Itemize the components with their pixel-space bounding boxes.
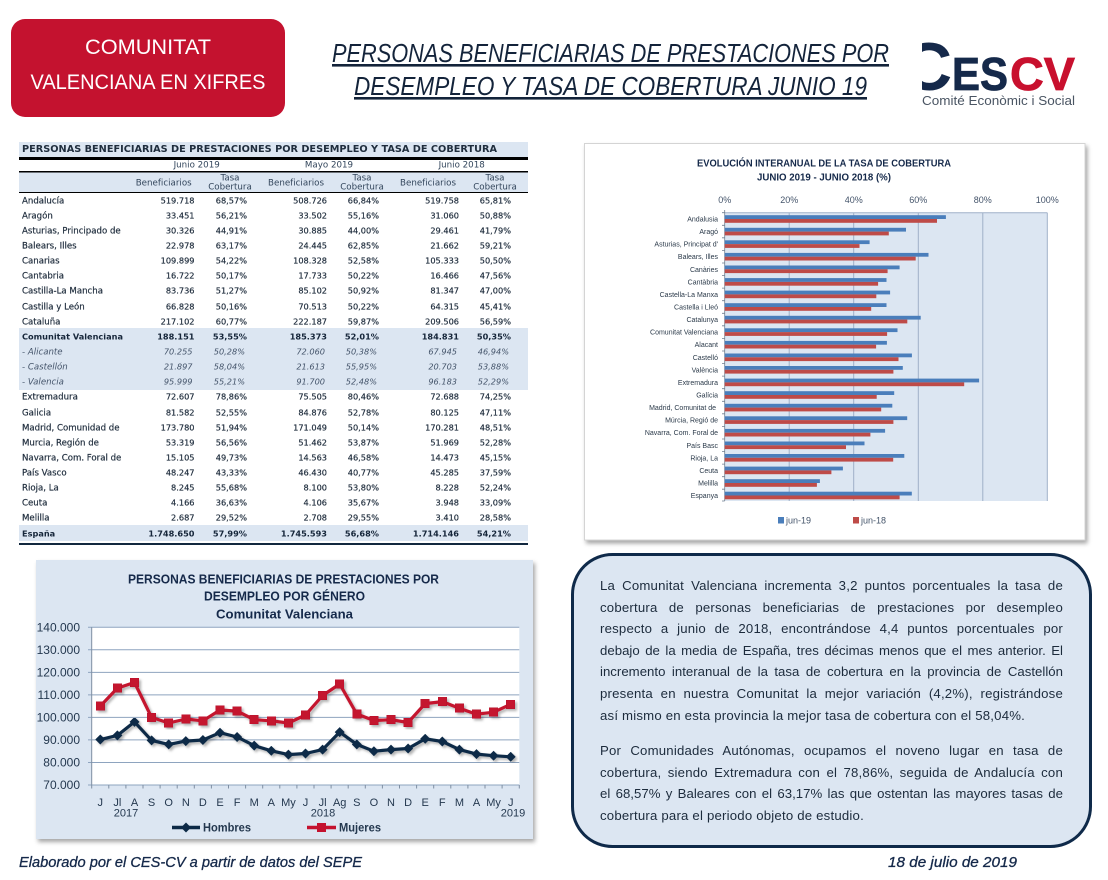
line chart legend: Mujeres: [339, 820, 381, 834]
table rows: 45,41%: [480, 302, 511, 312]
bar chart: evolución interanual de la tasa de cobertura: [584, 144, 1085, 540]
month labels: Jl: [113, 797, 121, 809]
table rows: 45,15%: [480, 453, 511, 463]
bar chart title: JUNIO 2019 - JUNIO 2018 (%): [757, 172, 891, 184]
month labels: [98, 797, 525, 820]
table header: Cobertura: [473, 182, 517, 192]
month labels: J: [508, 797, 513, 809]
table rows: 83.736: [166, 286, 194, 296]
table rows: 14.563: [298, 453, 327, 463]
logo: CES-CV: ES: [952, 48, 1008, 100]
table rows: Cataluña: [22, 318, 60, 328]
table rows: [22, 196, 511, 539]
month labels: 2019: [501, 808, 525, 820]
table title: PERSONAS BENEFICIARIAS DE PRESTACIONES POR DESEMPLEO Y TASA DE COBERTURA: [22, 144, 498, 155]
table rows: 52,55%: [216, 408, 247, 418]
y axis labels: 90.000: [43, 733, 80, 747]
table rows: 62,85%: [348, 241, 379, 251]
bar chart legend: jun-18: [860, 516, 886, 526]
table rows: Aragón: [22, 211, 53, 222]
table rows: 33.451: [166, 211, 194, 221]
month labels: D: [199, 797, 207, 809]
table rows: 222.187: [293, 316, 327, 326]
table rows: 21.897: [164, 362, 193, 372]
footer date: 18 de julio de 2019: [888, 854, 1018, 871]
line chart title: PERSONAS BENEFICIARIAS DE PRESTACIONES POR: [128, 572, 439, 586]
table rows: 209.506: [425, 316, 459, 326]
month labels: My: [281, 797, 296, 809]
table rows: 53,87%: [348, 438, 379, 448]
table rows: 53,80%: [348, 483, 379, 493]
table rows: 56,68%: [345, 529, 379, 539]
table rows: 46,94%: [478, 347, 509, 357]
table rows: 50,28%: [214, 347, 245, 357]
y axis labels: 140.000: [37, 620, 80, 634]
logo: CES-CV: CV: [1010, 48, 1075, 100]
table rows: Asturias, Principado de: [22, 227, 121, 237]
month labels: O: [164, 797, 173, 809]
bar chart axis: 60%: [909, 195, 927, 205]
table rows: Andalucía: [22, 197, 64, 207]
table rows: 54,21%: [477, 529, 511, 539]
table rows: Ceuta: [22, 499, 47, 509]
table rows: Canarias: [22, 257, 60, 267]
y axis labels: [37, 620, 80, 792]
table rows: 47,00%: [480, 286, 511, 296]
table rows: Castilla-La Mancha: [22, 287, 103, 297]
table rows: Balears, Illes: [22, 242, 77, 252]
month labels: M: [250, 797, 259, 809]
bar chart category labels: [645, 216, 718, 500]
text block: commentary: [600, 578, 1063, 823]
table rows: 185.373: [290, 332, 327, 342]
table rows: 59,21%: [480, 241, 511, 251]
text block: commentary: respecto a junio de 2018, encontrándose 4,4 puntos porcentuales por: [600, 621, 1063, 636]
table rows: 108.328: [293, 256, 327, 266]
y axis labels: 130.000: [37, 643, 80, 657]
table rows: 4.166: [171, 498, 194, 508]
table rows: 54,22%: [216, 256, 247, 266]
table rows: 1.714.146: [413, 529, 459, 539]
table rows: 8.100: [304, 483, 327, 493]
table rows: - Valencia: [22, 378, 64, 388]
table rows: 46,58%: [348, 453, 379, 463]
table rows: 96.183: [428, 377, 457, 387]
table rows: 49,73%: [216, 453, 247, 463]
table rows: 44,91%: [216, 226, 247, 236]
table rows: - Castellón: [22, 362, 68, 373]
table rows: Rioja, La: [22, 484, 59, 494]
text block: commentary: cobertura, siendo Extremadura con el 78,86%, seguida de Andalucía con: [600, 765, 1063, 780]
text block: commentary: incremento interanual de la tasa de cobertura en la provincia de Castellón: [600, 664, 1063, 679]
table rows: 51,27%: [216, 286, 247, 296]
bars jun-19: [725, 215, 979, 495]
table rows: España: [22, 529, 55, 539]
table rows: Castilla y León: [22, 302, 85, 312]
table rows: 52,28%: [480, 438, 511, 448]
table rows: 37,59%: [480, 468, 511, 478]
table rows: 47,11%: [480, 408, 511, 418]
table header: [136, 160, 517, 192]
table rows: 64.315: [430, 302, 459, 312]
table rows: 50,35%: [477, 332, 511, 342]
table rows: 81.347: [430, 286, 459, 296]
table rows: 51,94%: [216, 423, 247, 433]
bar chart legend: jun-19: [785, 516, 811, 526]
table rows: 29.461: [430, 226, 459, 236]
table rows: 52,78%: [348, 408, 379, 418]
month labels: D: [404, 797, 412, 809]
table rows: 20.703: [428, 362, 457, 372]
table rows: 52,01%: [345, 332, 379, 342]
table rows: 67.945: [428, 347, 457, 357]
table rows: 46.430: [298, 468, 327, 478]
title: [332, 38, 889, 101]
table rows: 53,88%: [478, 362, 509, 372]
table header: Cobertura: [208, 182, 252, 192]
table header: Beneficiarios: [400, 178, 456, 188]
table rows: 45.285: [430, 468, 459, 478]
table rows: 508.726: [293, 196, 327, 206]
title: PERSONAS BENEFICIARIAS DE PRESTACIONES POR: [332, 38, 889, 68]
table rows: Comunitat Valenciana: [22, 332, 123, 342]
table rows: 188.151: [157, 332, 195, 342]
month labels: Ag: [333, 797, 346, 809]
table rows: 519.718: [161, 196, 194, 206]
table rows: 59,87%: [348, 316, 379, 326]
month labels: M: [455, 797, 464, 809]
table rows: 55,16%: [348, 211, 379, 221]
table rows: 31.060: [430, 211, 459, 221]
table header: Junio 2019: [173, 160, 220, 170]
bar chart title: [697, 156, 951, 184]
table rows: 60,77%: [216, 316, 247, 326]
bar chart axis: [718, 195, 1059, 205]
bar chart category labels: Comunitat Valenciana: [650, 330, 718, 337]
table rows: 50,14%: [348, 423, 379, 433]
table rows: 40,77%: [348, 468, 379, 478]
table rows: 171.049: [293, 423, 327, 433]
table rows: 70.255: [164, 347, 192, 357]
table rows: 29,55%: [348, 513, 379, 523]
table rows: 50,17%: [216, 271, 247, 281]
logo: CES-CV: [922, 42, 1076, 105]
month labels: E: [422, 797, 429, 809]
table rows: 56,59%: [480, 316, 511, 326]
table header: Mayo 2019: [305, 160, 353, 170]
y axis labels: 110.000: [38, 688, 80, 702]
y axis labels: 100.000: [37, 710, 80, 724]
line chart legend: [172, 820, 381, 834]
month labels: A: [131, 797, 139, 809]
table rows: 52,48%: [346, 377, 377, 387]
table rows: 30.326: [166, 226, 194, 236]
bar chart category labels: Castella-La Manxa: [660, 292, 718, 299]
table rows: 47,56%: [480, 271, 511, 281]
month labels: 2017: [114, 808, 138, 820]
text block: commentary: La Comunitat Valenciana incrementa 3,2 puntos porcentuales la tasa de: [600, 578, 1063, 593]
table rows: 51.462: [298, 438, 327, 448]
text block: commentary: cobertura de personas beneficiarias de prestaciones por desempleo: [600, 600, 1063, 615]
bar chart category labels: Andalusia: [687, 216, 718, 224]
table header: Cobertura: [340, 182, 384, 192]
table rows: 41,79%: [480, 226, 511, 236]
bar chart category labels: Catalunya: [686, 317, 718, 324]
table rows: 68,57%: [216, 196, 247, 206]
table rows: 53,55%: [213, 332, 247, 342]
bar chart category labels: Canàries: [690, 267, 718, 274]
table rows: 52,24%: [480, 483, 511, 493]
table rows: 14.473: [430, 453, 459, 463]
table rows: 50,38%: [346, 347, 377, 357]
table rows: 72.060: [296, 347, 325, 357]
table rows: 72.688: [430, 392, 459, 402]
bar chart axis: 20%: [780, 195, 798, 205]
table rows: 52,29%: [478, 377, 509, 387]
table header: Tasa: [484, 174, 505, 184]
table rows: 55,95%: [346, 362, 377, 372]
table rows: 75.505: [298, 392, 327, 402]
table rows: 43,33%: [216, 468, 247, 478]
table header: Junio 2018: [438, 160, 485, 170]
bar chart category labels: Aragó: [699, 229, 718, 236]
table rows: 80.125: [430, 408, 459, 418]
month labels: A: [473, 797, 481, 809]
month labels: N: [182, 797, 190, 809]
table rows: 22.978: [166, 241, 194, 251]
bars jun-18: [725, 219, 964, 499]
table rows: 44,00%: [348, 226, 379, 236]
series: Hombres: [100, 722, 511, 757]
logo: CES-CV: C: [903, 29, 952, 105]
month labels: Jl: [319, 797, 327, 809]
table rows: 3.410: [436, 513, 459, 523]
table rows: 50,50%: [480, 256, 511, 266]
table rows: 48,51%: [480, 423, 511, 433]
table rows: 78,86%: [216, 392, 247, 402]
table rows: 519.758: [425, 196, 459, 206]
bar chart category labels: Múrcia, Regió de: [665, 418, 718, 425]
table rows: 21.662: [430, 241, 459, 251]
table rows: 95.999: [164, 377, 192, 387]
table header: Tasa: [351, 174, 372, 184]
table rows: 30.885: [298, 226, 327, 236]
table rows: 170.281: [425, 423, 459, 433]
table rows: 28,58%: [480, 513, 511, 523]
table rows: 105.333: [425, 256, 459, 266]
bar chart category labels: Castelló: [693, 355, 718, 362]
table rows: País Vasco: [22, 469, 67, 479]
table rows: 17.733: [298, 271, 327, 281]
bar chart axis: 80%: [974, 195, 992, 205]
table rows: 33,09%: [480, 498, 511, 508]
table rows: 51.969: [430, 438, 459, 448]
table rows: 48.247: [166, 468, 194, 478]
month labels: A: [268, 797, 276, 809]
table rows: 4.106: [304, 498, 327, 508]
month labels: My: [486, 797, 501, 809]
bar chart axis: 0%: [718, 195, 731, 205]
table rows: 184.831: [422, 332, 459, 342]
table rows: 56,21%: [216, 211, 247, 221]
table rows: 56,56%: [216, 438, 247, 448]
table rows: 2.687: [171, 513, 194, 523]
text block: commentary: así mismo en esta provincia la mejor tasa de cobertura con el 58,04%.: [600, 708, 1025, 723]
month labels: 2018: [311, 808, 335, 820]
title: DESEMPLEO Y TASA DE COBERTURA JUNIO 19: [354, 71, 867, 101]
table rows: 50,88%: [480, 211, 511, 221]
table rows: Cantabria: [22, 272, 64, 282]
text block: commentary: debajo de la media de España, tres décimas menos que el mes anterior. El: [600, 643, 1063, 658]
bar chart category labels: Madrid, Comunitat de: [649, 405, 716, 412]
month labels: F: [439, 797, 446, 809]
bar chart category labels: Navarra, Com. Foral de: [645, 430, 718, 437]
table rows: 53.319: [166, 438, 194, 448]
month labels: F: [234, 797, 241, 809]
table rows: Murcia, Región de: [22, 438, 99, 449]
bar chart category labels: Castella i Lleó: [674, 304, 718, 312]
table rows: Navarra, Com. Foral de: [22, 454, 121, 464]
table rows: 55,68%: [216, 483, 247, 493]
bar chart category labels: Alacant: [695, 342, 718, 349]
badge: Comunitat Valenciana en xifres: VALENCIANA EN XIFRES: [30, 71, 266, 94]
table rows: 1.748.650: [148, 529, 195, 539]
table rows: 173.780: [161, 423, 194, 433]
table rows: 52,58%: [348, 256, 379, 266]
table rows: Galicia: [22, 409, 51, 419]
footer source: Elaborado por el CES-CV a partir de datos del SEPE: [19, 854, 363, 871]
table rows: - Alicante: [22, 348, 63, 358]
bar chart category labels: Galícia: [696, 392, 718, 400]
text block: commentary: cobertura para el periodo objeto de estudio.: [600, 808, 864, 823]
table rows: 3.948: [436, 498, 459, 508]
bar chart category labels: Melilla: [698, 480, 718, 488]
badge: Comunitat Valenciana en xifres: COMUNITAT: [85, 36, 211, 59]
bar chart category labels: Balears, Illes: [678, 254, 718, 261]
bar chart legend: [778, 516, 886, 526]
table rows: 36,63%: [216, 498, 247, 508]
logo: CES-CV: Comité Econòmic i Social: [922, 94, 1075, 108]
bar chart category labels: Extremadura: [678, 380, 718, 387]
y axis labels: 70.000: [43, 778, 80, 792]
table rows: 29,52%: [216, 513, 247, 523]
line chart: beneficiarias por género: [36, 560, 533, 839]
table rows: 21.613: [296, 362, 325, 372]
table rows: 81.582: [166, 408, 194, 418]
table rows: 15.105: [166, 453, 194, 463]
bar chart category labels: València: [692, 367, 718, 374]
table rows: 2.708: [304, 513, 327, 523]
month labels: E: [216, 797, 224, 809]
bar chart category labels: Cantàbria: [688, 279, 718, 286]
table rows: 8.228: [436, 483, 459, 493]
table rows: 84.876: [298, 408, 327, 418]
table rows: 50,92%: [348, 286, 379, 296]
table rows: 91.700: [296, 377, 325, 387]
table header: Beneficiarios: [136, 178, 192, 188]
table rows: 109.899: [161, 256, 194, 266]
table rows: 70.513: [298, 302, 327, 312]
table rows: 57,99%: [213, 529, 247, 539]
table rows: 16.722: [166, 271, 194, 281]
bar chart axis: 40%: [845, 195, 863, 205]
text block: commentary: Por Comunidades Autónomas, ocupamos el noveno lugar en tasa de: [600, 743, 1063, 758]
table header: Tasa: [219, 174, 240, 184]
table rows: Extremadura: [22, 393, 78, 403]
table rows: 217.102: [161, 316, 194, 326]
table: beneficiarias por comunidad: [19, 142, 528, 545]
text block: commentary: el 68,57% y Baleares con el 63,17% las que ostentan las mayores tasas de: [600, 786, 1063, 801]
month labels: S: [353, 797, 360, 809]
table rows: 1.745.593: [281, 529, 327, 539]
table rows: Madrid, Comunidad de: [22, 424, 120, 434]
table rows: 65,81%: [480, 196, 511, 206]
text block: commentary: presenta en nuestra Comunitat la mejor variación (4,2%), registrándose: [600, 686, 1063, 701]
table rows: 72.607: [166, 392, 194, 402]
bar chart axis: 100%: [1036, 195, 1059, 205]
series: Mujeres: [100, 682, 511, 723]
table rows: 80,46%: [348, 392, 379, 402]
table rows: 50,16%: [216, 302, 247, 312]
month labels: J: [303, 797, 308, 809]
table rows: 16.466: [430, 271, 459, 281]
badge: Comunitat Valenciana en xifres: [11, 19, 285, 117]
line chart title: [128, 572, 439, 622]
table header: Beneficiarios: [268, 178, 324, 188]
table rows: 74,25%: [480, 392, 511, 402]
line chart title: DESEMPLEO POR GÉNERO: [204, 588, 365, 604]
month labels: S: [148, 797, 155, 809]
bar chart category labels: Ceuta: [699, 468, 718, 475]
table rows: 66,84%: [348, 196, 379, 206]
bar chart title: EVOLUCIÓN INTERANUAL DE LA TASA DE COBERTURA: [697, 156, 951, 170]
table rows: 63,17%: [216, 241, 247, 251]
line chart title: Comunitat Valenciana: [216, 608, 354, 622]
table rows: 33.502: [298, 211, 327, 221]
panel: commentary background: [572, 554, 1090, 846]
table rows: 85.102: [298, 286, 327, 296]
table rows: 50,22%: [348, 271, 379, 281]
table rows: 35,67%: [348, 498, 379, 508]
line chart legend: Hombres: [203, 820, 251, 834]
table rows: 8.245: [171, 483, 194, 493]
table rows: 50,22%: [348, 302, 379, 312]
table rows: Melilla: [22, 514, 50, 524]
bar chart category labels: País Basc: [686, 443, 718, 450]
y axis labels: 80.000: [43, 756, 80, 770]
bar chart category labels: Espanya: [691, 493, 718, 500]
table rows: 55,21%: [214, 377, 245, 387]
table rows: 58,04%: [214, 362, 245, 372]
table rows: 66.828: [166, 302, 194, 312]
bar chart category labels: Asturias, Principat d': [654, 242, 718, 249]
month labels: N: [387, 797, 395, 809]
table rows: 24.445: [298, 241, 327, 251]
month labels: O: [370, 797, 379, 809]
bar chart category labels: Rioja, La: [690, 455, 718, 462]
y axis labels: 120.000: [37, 666, 80, 680]
month labels: J: [98, 797, 103, 809]
